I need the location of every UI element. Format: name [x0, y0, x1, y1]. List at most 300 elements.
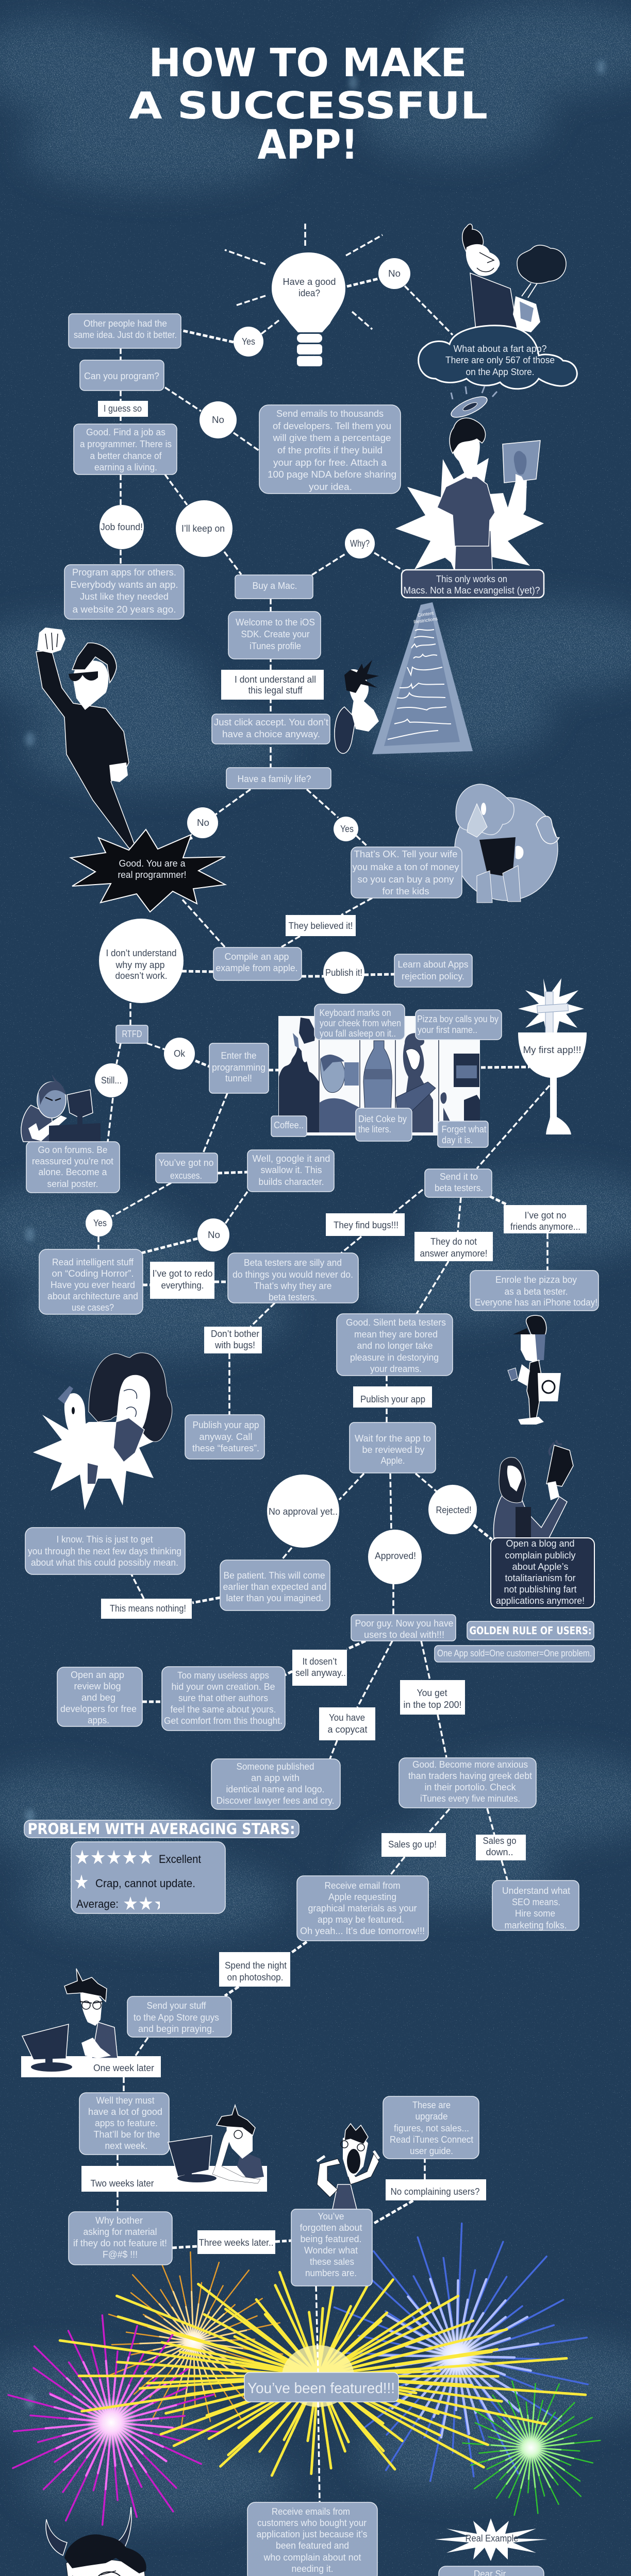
- box: send emails: your app for free. Attach a: [273, 457, 387, 468]
- box: welcome: iTunes profile: [250, 641, 301, 651]
- arrow: approved to poor guy: [392, 1584, 394, 1614]
- arrow: grail to beta: [477, 1086, 550, 1168]
- label: no answer: answer anymore!: [420, 1248, 488, 1259]
- box: well they must: That’ll be for the: [94, 2129, 160, 2140]
- callout: real programmer starburst: real programmer!: [118, 870, 187, 880]
- node: why: [345, 529, 375, 558]
- label: doesnt sell: It dosen’t: [302, 1656, 337, 1667]
- label: copycat: [319, 1707, 375, 1740]
- rating: crap: Crap, cannot update.: [95, 1877, 195, 1890]
- thought cloud: fart app: [419, 326, 577, 389]
- label: sales down: down..: [486, 1847, 513, 1857]
- box: welcome: [228, 612, 321, 659]
- box: enrole pizza boy: Everyone has an iPhone today!: [475, 1297, 597, 1308]
- node: still: Still...: [101, 1075, 122, 1086]
- arrow: sales down to seo: [502, 1860, 507, 1880]
- label: no complaining users: No complaining users?: [391, 2187, 479, 2197]
- label: doesnt sell: sell anyway..: [295, 1668, 346, 1678]
- box: rtfd: RTFD: [122, 1029, 142, 1039]
- node: i'll keep on: I’ll keep on: [181, 523, 225, 534]
- box: useless apps: Get comfort from this thought.: [164, 1716, 283, 1726]
- box: no excuses: excuses.: [170, 1171, 202, 1181]
- box: rejection policy: [394, 954, 472, 987]
- arrow: well to two weeks: [117, 2155, 119, 2166]
- box: seo: Hire some: [515, 1908, 555, 1919]
- node: no: [378, 258, 410, 289]
- arrow: send stuff to one week: [136, 2038, 148, 2056]
- box: one app sold: One App sold=One customer=One problem.: [437, 1648, 592, 1658]
- icon: light bulb: Have a good: [283, 277, 336, 287]
- thought cloud: fart app: There are only 567 of those: [445, 355, 555, 365]
- box: send emails: 100 page NDA before sharing: [268, 469, 396, 480]
- box: coffee: [271, 1116, 307, 1137]
- rating: average: Average:: [76, 1897, 119, 1910]
- box: wait for review: Wait for the app to: [355, 1433, 431, 1444]
- title: [129, 40, 488, 168]
- illustration: terms pyramid: [372, 602, 473, 754]
- thought cloud: fart app: on the App Store.: [466, 367, 534, 377]
- box: diet coke: the liters.: [358, 1124, 391, 1134]
- node: publish it: Publish it!: [325, 968, 362, 978]
- arrow: family to no: [215, 789, 251, 815]
- box: receive emails: been featured and: [276, 2540, 349, 2551]
- box: welcome: SDK. Create your: [241, 629, 309, 639]
- box: forgotten featured: forgotten about: [300, 2223, 362, 2233]
- box: programming tunnel: tunnel!: [225, 1073, 252, 1083]
- node: rejected: Rejected!: [436, 1505, 471, 1515]
- box: someone published: identical name and logo.: [226, 1784, 325, 1794]
- callout: real example starburst: [435, 2518, 547, 2561]
- illustration: terms pyramid: Restrictions: [413, 616, 438, 624]
- box: compile: Compile an app: [225, 952, 289, 962]
- box: useless apps: hid your own creation. Be: [171, 1682, 275, 1692]
- box: wait for review: be reviewed by: [362, 1445, 425, 1455]
- node: yes: Yes: [340, 824, 354, 834]
- box: review blog: and beg: [81, 1692, 115, 1703]
- box: poor guy: [351, 1615, 456, 1641]
- box: review blog: Open an app: [71, 1670, 124, 1680]
- arrow: wait to rejected: [416, 1473, 437, 1492]
- arrow: patient to nothing: [192, 1598, 220, 1603]
- box: other people: [69, 314, 181, 348]
- box: forgotten featured: these sales: [310, 2257, 354, 2267]
- label: spend the night: Spend the night: [225, 1960, 287, 1971]
- illustration: confused guy: [335, 660, 379, 753]
- box: silent testers: your dreams.: [370, 1364, 422, 1374]
- box: beta testers silly: [228, 1253, 358, 1303]
- label: legal stuff: [221, 670, 324, 700]
- box: forums: [26, 1142, 120, 1193]
- box: upgrade figures: These are: [412, 2100, 451, 2110]
- box: forgotten featured: being featured.: [300, 2234, 362, 2244]
- box: i know: about what this could possibly mean.: [31, 1557, 178, 1568]
- box: forums: Go on forums. Be: [38, 1145, 107, 1155]
- arrow: no to fart cloud: [405, 286, 453, 335]
- box: keyboard marks: your cheek from when: [320, 1018, 401, 1028]
- node: publish it: [323, 952, 364, 994]
- box: enrole pizza boy: [470, 1270, 599, 1311]
- box: click accept: have a choice anyway.: [222, 729, 320, 739]
- box: useless apps: Too many useless apps: [177, 1670, 269, 1681]
- box: open a blog: [491, 1538, 594, 1608]
- arrow: dont bother to publish anyway: [228, 1353, 230, 1415]
- arrow: one week to well: [123, 2077, 125, 2093]
- illustration: mac evangelist with halo: [395, 386, 544, 570]
- arrow: excuses to yes: [112, 1183, 171, 1216]
- label: spend the night: [219, 1952, 290, 1987]
- arrow: rtfd to still: [117, 1043, 121, 1064]
- icon: one star: ★: [74, 1871, 89, 1893]
- arrow: pony to believed: [341, 898, 372, 915]
- arrow: believed to compile: [281, 936, 300, 947]
- box: well they must: Well they must: [96, 2095, 155, 2106]
- box: google it: Well, google it and: [253, 1154, 330, 1164]
- arrow: keep on to buy a mac: [224, 552, 241, 574]
- box: why bother: if they do not feature it!: [73, 2238, 167, 2248]
- box: send stuff: Send your stuff: [146, 2001, 206, 2011]
- label: copycat: You have: [329, 1713, 365, 1723]
- box: pizza boy: your first name..: [418, 1025, 477, 1035]
- icon: light bulb: [272, 252, 345, 366]
- node: ok: [164, 1038, 195, 1070]
- node: i dont understand: I don’t understand: [106, 948, 176, 958]
- box: youve been featured: [244, 2372, 398, 2402]
- node: i'll keep on: [176, 500, 233, 557]
- box: pony: That’s OK. Tell your wife: [354, 849, 458, 859]
- box: pizza boy: Pizza boy calls you by: [417, 1014, 499, 1024]
- label: no answer: They do not: [430, 1236, 477, 1247]
- node: approved: [368, 1530, 422, 1584]
- arrow: anxious to sales down: [487, 1808, 494, 1835]
- arrow: useless to review blog: [142, 1700, 162, 1703]
- node: no approval yet: [267, 1475, 339, 1548]
- box: click accept: Just click accept. You don’t: [214, 717, 328, 727]
- box: compile: example from apple.: [215, 963, 298, 973]
- box: other people: Other people had the: [84, 318, 167, 329]
- label: redo everything: everything.: [161, 1280, 204, 1291]
- node: job found: Job found!: [101, 522, 143, 532]
- arrow: no friends to enrole: [546, 1233, 549, 1270]
- arrow: job to keep on: [165, 474, 187, 505]
- arrow: wait to approved: [390, 1473, 391, 1530]
- box: find a job: a programmer. There is: [80, 439, 172, 449]
- label: redo everything: [150, 1262, 214, 1299]
- title: APP!: [258, 122, 358, 168]
- label: sales down: Sales go: [483, 1836, 517, 1846]
- box: coffee: Coffee..: [274, 1120, 304, 1130]
- arrow: ok to tunnel: [195, 1061, 209, 1066]
- node: i dont understand: why my app: [115, 960, 165, 970]
- box: well they must: have a lot of good: [88, 2107, 162, 2117]
- box: seo: marketing folks.: [504, 1920, 567, 1930]
- arrow: email to photoshop: [291, 1942, 307, 1953]
- arrow: tunnel to comic: [269, 1069, 278, 1072]
- arrow: poor guy to copycat: [357, 1641, 392, 1707]
- arrow: family to yes: [307, 789, 338, 818]
- box: mac only note: Macs. Not a Mac evangelist (yet)?: [403, 585, 540, 596]
- label: dont bother: [204, 1327, 262, 1353]
- box: be patient: earlier than expected and: [223, 1582, 327, 1592]
- firework: magenta: [0, 2308, 228, 2534]
- box: open a blog: totalitarianism for: [505, 1573, 575, 1583]
- box: someone published: [211, 1759, 340, 1809]
- box: useless apps: sure that other authors: [178, 1693, 268, 1703]
- box: program apps: Program apps for others.: [72, 567, 176, 578]
- box: forget day: [438, 1121, 488, 1147]
- illustration: angry blogger: [493, 1441, 573, 1538]
- label: they find bugs: They find bugs!!!: [334, 1220, 398, 1230]
- box: buy a mac: Buy a Mac.: [253, 581, 297, 591]
- box: programming tunnel: [209, 1043, 269, 1093]
- box: receive emails: [247, 2502, 377, 2576]
- box: someone published: Someone published: [236, 1761, 314, 1772]
- box: email from apple: Oh yeah... It’s due tomorrow!!!: [300, 1926, 425, 1936]
- arrow: two weeks to why bother: [117, 2192, 119, 2211]
- box: mac only note: [402, 570, 544, 598]
- label: no friends: I’ve got no: [525, 1210, 566, 1221]
- label: spend the night: on photoshop.: [227, 1972, 284, 1982]
- arrow: copycat to someone: [330, 1740, 337, 1759]
- box: silent testers: Good. Silent beta testers: [346, 1317, 446, 1328]
- box: other people: same idea. Just do it better.: [74, 330, 177, 340]
- node: ok: Ok: [174, 1048, 186, 1059]
- box: coding horror: Read intelligent stuff: [52, 1257, 134, 1267]
- box: coding horror: [39, 1249, 143, 1314]
- callout: real programmer starburst: Good. You are a: [119, 858, 186, 869]
- label: two weeks later: [81, 2166, 267, 2192]
- box: well they must: apps to feature.: [95, 2118, 158, 2128]
- arrow: compile to publish: [302, 975, 324, 978]
- node: no: No: [197, 818, 209, 828]
- label: top 200: [400, 1680, 465, 1715]
- comic: programming tunnel panels: [278, 1016, 480, 1136]
- box: receive emails: customers who bought your: [257, 2518, 367, 2528]
- arrow: no answer to silent: [417, 1261, 449, 1314]
- box: beta testers silly: That’s why they are: [254, 1281, 332, 1291]
- arrow: no to send emails: [234, 433, 259, 451]
- box: can you program: [80, 360, 164, 391]
- arrow: bulb to yes: [261, 320, 279, 334]
- panel: star ratings: [71, 1842, 225, 1914]
- box: rtfd: [116, 1025, 148, 1043]
- box: open a blog: complain publicly: [505, 1550, 575, 1561]
- title: A SUCCESSFUL: [129, 84, 488, 127]
- box: enrole pizza boy: Enrole the pizza boy: [495, 1275, 577, 1285]
- box: diet coke: [356, 1108, 412, 1141]
- label: two weeks later: Two weeks later: [91, 2178, 154, 2189]
- arrow: bulb rays: [225, 224, 383, 329]
- firework: yellow: [52, 2257, 592, 2493]
- box: why bother: F@#$ !!!: [103, 2249, 138, 2260]
- box: send to beta testers: Send it to: [440, 1172, 478, 1182]
- label: top 200: in the top 200!: [403, 1700, 462, 1710]
- box: send emails: of the profits if they build: [277, 445, 383, 455]
- box: program apps: [64, 565, 184, 619]
- box: program apps: a website 20 years ago.: [72, 604, 176, 615]
- illustration: screaming guy: [317, 2124, 379, 2209]
- box: find a job: earning a living.: [94, 462, 157, 472]
- box: send to beta testers: [425, 1169, 492, 1197]
- arrow: find bugs to silly: [341, 1236, 361, 1253]
- arrow: bulb to no: [347, 279, 378, 286]
- box: find a job: [74, 424, 177, 474]
- box: email from apple: graphical materials as your: [308, 1903, 417, 1913]
- box: forgotten featured: You’ve: [318, 2211, 344, 2222]
- label: they believed it: They believed it!: [289, 921, 353, 931]
- arrow: beta to no answer: [458, 1197, 461, 1232]
- box: someone published: an app with: [251, 1773, 300, 1783]
- arrow: poor guy to top 200: [421, 1641, 430, 1680]
- box: forums: serial poster.: [47, 1179, 98, 1189]
- label: sales down: [476, 1835, 526, 1860]
- box: why bother: asking for material: [84, 2227, 157, 2237]
- icon: five stars: ★★★★★: [74, 1846, 154, 1869]
- arrow: silly to dont bother: [251, 1303, 275, 1327]
- arrow: buy a mac to why: [312, 554, 345, 575]
- arrow: compile to not understand: [181, 971, 213, 972]
- box: silent testers: and no longer take: [357, 1341, 433, 1351]
- box: send emails: [259, 405, 401, 494]
- label: doesnt sell: [292, 1650, 347, 1686]
- node: yes: Yes: [93, 1218, 107, 1228]
- node: no approval yet: No approval yet..: [269, 1506, 338, 1517]
- arrow: google to no: [225, 1192, 247, 1224]
- heading: problem with averaging stars: PROBLEM WITH AVERAGING STARS:: [28, 1820, 295, 1838]
- arrow: still to forums: [108, 1098, 113, 1142]
- box: beta testers silly: beta testers.: [269, 1292, 317, 1302]
- arrow: complaining to upgrade: [424, 2159, 426, 2179]
- box: program apps: Just like they needed: [80, 591, 169, 602]
- arrow: anxious to sales up: [428, 1809, 450, 1833]
- box: upgrade figures: user guide.: [410, 2146, 453, 2156]
- box: forget day: Forget what: [441, 1124, 487, 1134]
- firework: blue: [303, 2201, 615, 2509]
- box: upgrade figures: [383, 2096, 479, 2159]
- icon: two and a half stars: ★★★: [123, 1893, 169, 1914]
- box: keyboard marks: [314, 1004, 405, 1040]
- label: i guess so: I guess so: [104, 403, 142, 414]
- box: be patient: Be patient. This will come: [224, 1570, 325, 1581]
- box: pony: so you can buy a pony: [358, 874, 454, 885]
- label: copycat: a copycat: [328, 1724, 367, 1735]
- node: no: [200, 401, 237, 438]
- label: legal stuff: this legal stuff: [248, 685, 303, 696]
- arrow: sales up to email: [390, 1857, 405, 1876]
- arrow: why bother to three weeks: [172, 2246, 197, 2248]
- box: review blog: developers for free: [60, 1704, 137, 1714]
- box: mac only note: This only works on: [436, 574, 507, 584]
- node: no: [187, 807, 218, 838]
- arrow: top 200 to anxious: [438, 1715, 446, 1757]
- box: can you program: Can you program?: [84, 371, 159, 381]
- box: find a job: a better chance of: [90, 451, 162, 461]
- box: programming tunnel: programming: [212, 1062, 265, 1073]
- box: be patient: later than you imagined.: [226, 1593, 324, 1603]
- label: i guess so: [98, 401, 148, 417]
- arrow: beta to find bugs: [393, 1190, 423, 1213]
- box: receive emails: application just because it’s: [257, 2529, 367, 2539]
- box: click accept: [212, 714, 330, 744]
- box: seo: Understand what: [502, 1886, 570, 1896]
- label: three weeks later: [197, 2230, 275, 2254]
- box: poor guy: users to deal with!!!: [364, 1630, 444, 1640]
- illustration: praying guy at monitor: [21, 1969, 161, 2077]
- box: publish anyway: [185, 1415, 264, 1459]
- box: send emails: of developers. Tell them you: [273, 421, 391, 431]
- arrow: publish to rejection: [364, 974, 394, 975]
- box: dear sir: [439, 2566, 544, 2576]
- box: forgotten featured: [291, 2209, 372, 2286]
- node: rejected: [428, 1485, 477, 1534]
- box: compile: [213, 947, 302, 980]
- box: send stuff: to the App Store guys: [134, 2012, 219, 2023]
- box: anxious: than traders having greek debt: [408, 1771, 532, 1781]
- box: program apps: Everybody wants an app.: [70, 580, 178, 590]
- arrow: can program to no: [165, 387, 201, 411]
- box: publish anyway: these “features”.: [192, 1443, 259, 1453]
- box: family life: [226, 768, 331, 789]
- box: open a blog: about Apple’s: [512, 1562, 568, 1572]
- node: why: Why?: [350, 538, 370, 549]
- box: wait for review: [350, 1422, 436, 1473]
- box: silent testers: [337, 1314, 453, 1376]
- box: open a blog: applications anymore!: [496, 1596, 585, 1606]
- box: poor guy: Poor guy. Now you have: [355, 1618, 454, 1629]
- box: pony: you make a ton of money: [353, 862, 459, 872]
- label: redo everything: I’ve got to redo: [153, 1268, 212, 1279]
- icon: light bulb: idea?: [298, 288, 320, 298]
- label: no answer: [414, 1232, 493, 1261]
- arrow: three weeks to forgotten: [275, 2241, 291, 2242]
- label: publish your app: Publish your app: [360, 1394, 425, 1404]
- box: why bother: Why bother: [95, 2215, 143, 2226]
- arrow: featured to emails: [318, 2402, 320, 2502]
- arrow: sdk sequence: [270, 599, 272, 768]
- node: i dont understand: [99, 919, 184, 1003]
- box: email from apple: app may be featured.: [318, 1914, 404, 1925]
- label: no friends: [504, 1205, 587, 1233]
- heading: golden rule of users: GOLDEN RULE OF USERS:: [469, 1624, 592, 1637]
- box: receive emails: Receive emails from: [272, 2506, 350, 2517]
- box: anxious: [399, 1758, 536, 1808]
- illustration: woman with wild hair: [33, 1353, 172, 1510]
- box: email from apple: [297, 1876, 428, 1941]
- box: receive emails: who complain about not: [263, 2552, 361, 2563]
- box: send emails: will give them a percentage: [272, 433, 391, 443]
- label: dont bother: Don’t bother: [211, 1329, 259, 1339]
- box: family life: Have a family life?: [237, 774, 311, 784]
- node: yes: [334, 817, 358, 841]
- box: pizza boy: [416, 1010, 502, 1040]
- box: silent testers: mean they are bored: [354, 1329, 438, 1340]
- box: send to beta testers: beta testers.: [435, 1183, 483, 1193]
- box: i know: [25, 1528, 185, 1574]
- node: yes: [234, 327, 263, 357]
- box: receive emails: needing it.: [292, 2564, 333, 2574]
- box: no excuses: [156, 1153, 218, 1183]
- box: i know: you through the next few days thinking: [28, 1546, 181, 1556]
- box: useless apps: [162, 1667, 285, 1731]
- callout: real example starburst: Real Example: [465, 2533, 519, 2544]
- label: means nothing: [101, 1599, 192, 1619]
- arrow: why to mac note: [374, 553, 403, 570]
- label: publish your app: [353, 1386, 432, 1408]
- node: approved: Approved!: [375, 1551, 416, 1561]
- box: anxious: Good. Become more anxious: [412, 1759, 528, 1770]
- box: rejection policy: rejection policy.: [402, 971, 464, 981]
- box: open a blog: not publishing fart: [504, 1584, 576, 1595]
- box: send emails: Send emails to thousands: [276, 409, 384, 419]
